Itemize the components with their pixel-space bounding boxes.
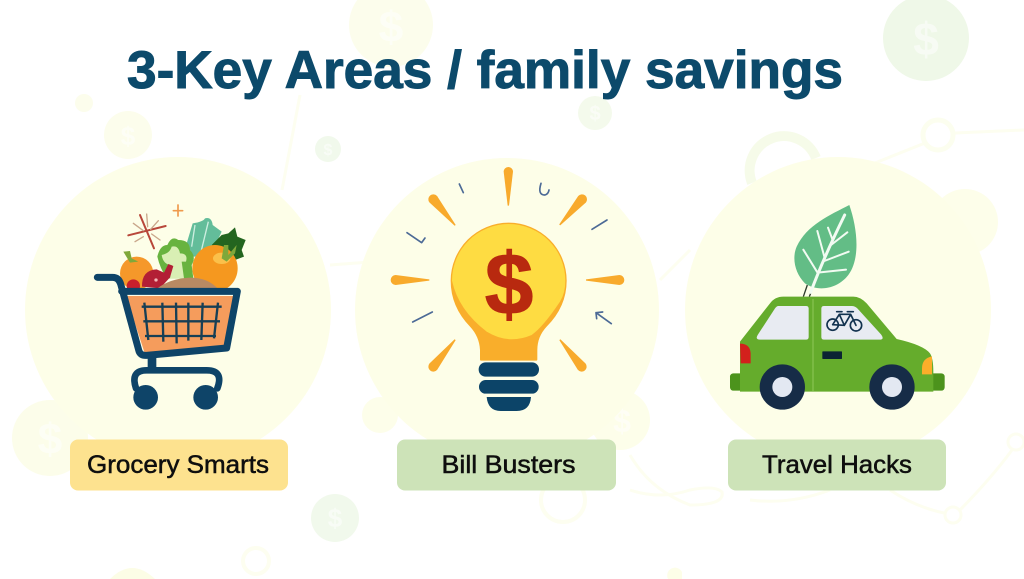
background pattern: coins and network lines: $ (121, 121, 136, 151)
label: Grocery Smarts (70, 440, 288, 490)
label: Bill Busters (397, 440, 616, 490)
label: Travel Hacks: Travel Hacks (762, 451, 912, 479)
background pattern: coins and network lines: $ (589, 103, 601, 125)
icon: light bulb with dollar sign: $ (485, 235, 533, 333)
label: Grocery Smarts: Grocery Smarts (87, 451, 269, 479)
label: Travel Hacks (728, 440, 946, 490)
background pattern: coins and network lines: $ (38, 415, 62, 464)
icon: green car with leaf and bicycle (730, 205, 945, 410)
icon: shopping cart with produce (97, 205, 246, 410)
background pattern: coins and network lines: $ (328, 503, 343, 533)
panel: Travel Hacks (685, 157, 991, 490)
label: Bill Busters: Bill Busters (442, 451, 576, 479)
background pattern: coins and network lines: $ (379, 3, 403, 52)
panel: Grocery Smarts (25, 157, 331, 490)
background pattern: coins and network lines: $ (913, 13, 939, 65)
background pattern: coins and network lines: $ (324, 142, 333, 159)
circle background: bills (355, 158, 659, 462)
icon: bicycle (827, 312, 862, 331)
circle background: travel (685, 157, 991, 463)
panel: Bill Busters (355, 158, 659, 490)
background pattern: coins and network lines: $ (613, 403, 631, 439)
title: 3-Key Areas / family savings (127, 41, 843, 100)
circle background: grocery (25, 157, 331, 463)
icon: light bulb with dollar sign (391, 167, 624, 411)
